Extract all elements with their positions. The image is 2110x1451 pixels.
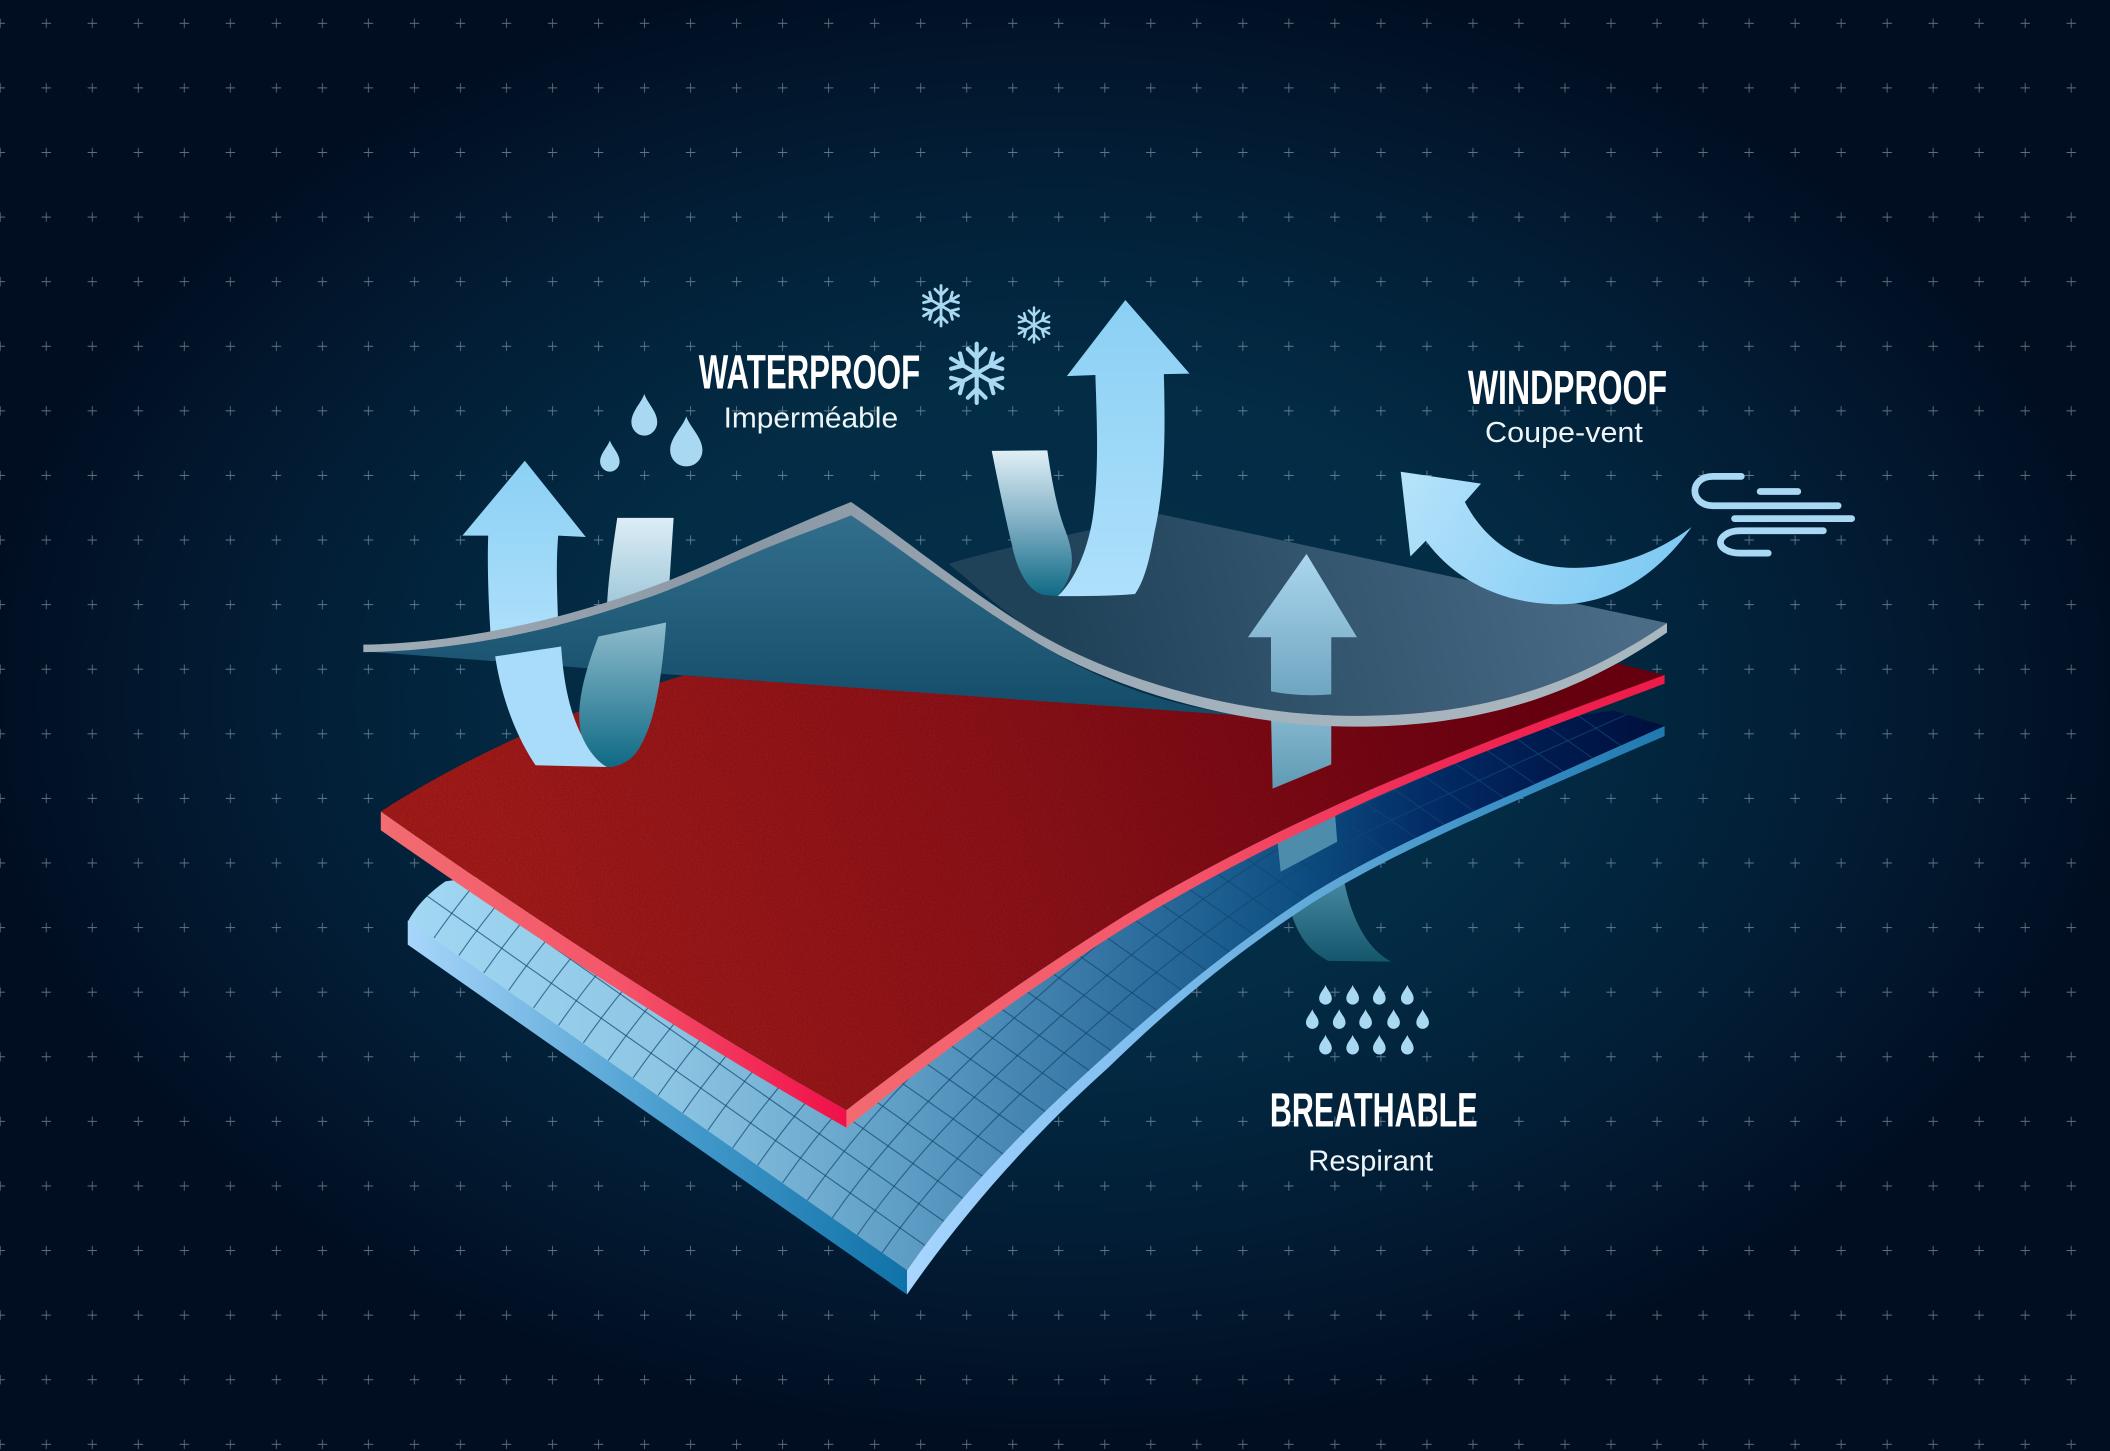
icon: wind lines — [1695, 476, 1852, 553]
label: windproof — [1468, 361, 1667, 448]
blue grid base layer — [408, 710, 1665, 1294]
label: breathable: BREATHABLE — [1270, 1084, 1478, 1138]
wind arrow — [1401, 472, 1691, 604]
icon: water drops — [600, 394, 702, 472]
blue layer mesh lines — [427, 714, 1627, 1253]
large centre arrow — [992, 300, 1190, 596]
icon: snowflakes — [921, 286, 1052, 403]
blue layer top surface — [408, 711, 1665, 1270]
label: waterproof — [699, 346, 920, 433]
label: windproof: WINDPROOF — [1468, 361, 1667, 415]
left arrow back band upper — [607, 518, 674, 608]
centre arrow head and front band — [1058, 300, 1190, 596]
blue layer left edge — [408, 920, 907, 1295]
left arrow lower part — [495, 623, 666, 767]
red layer top surface — [381, 653, 1665, 1110]
breathable arrow head — [1248, 554, 1357, 695]
red layer grain texture — [381, 653, 1665, 1110]
label: breathable — [1270, 1084, 1478, 1177]
label: waterproof: WATERPROOF — [699, 346, 920, 400]
label: breathable: Respirant — [1308, 1145, 1433, 1177]
red middle layer — [381, 653, 1665, 1128]
arrow tail emerging below fabric — [1285, 875, 1391, 962]
membrane back flap — [949, 514, 1667, 716]
label: windproof: Coupe-vent — [1485, 416, 1643, 448]
membrane front sheet — [363, 511, 1272, 719]
membrane edge strip — [363, 502, 1667, 727]
blue layer right edge — [907, 726, 1665, 1295]
centre arrow back band — [992, 450, 1072, 596]
arrow segment seen through blue layer — [1277, 811, 1337, 872]
icon: rain drops — [1306, 985, 1429, 1054]
left arrow front tail — [495, 646, 607, 767]
left arrow head and shaft — [462, 461, 586, 643]
red layer right edge — [846, 675, 1665, 1128]
left arrow teal inner band — [579, 623, 666, 767]
label: waterproof: Imperméable — [724, 401, 898, 433]
red layer left edge — [381, 811, 846, 1128]
left arrow upper part — [462, 461, 674, 643]
arrow segment over red layer — [1271, 713, 1331, 789]
